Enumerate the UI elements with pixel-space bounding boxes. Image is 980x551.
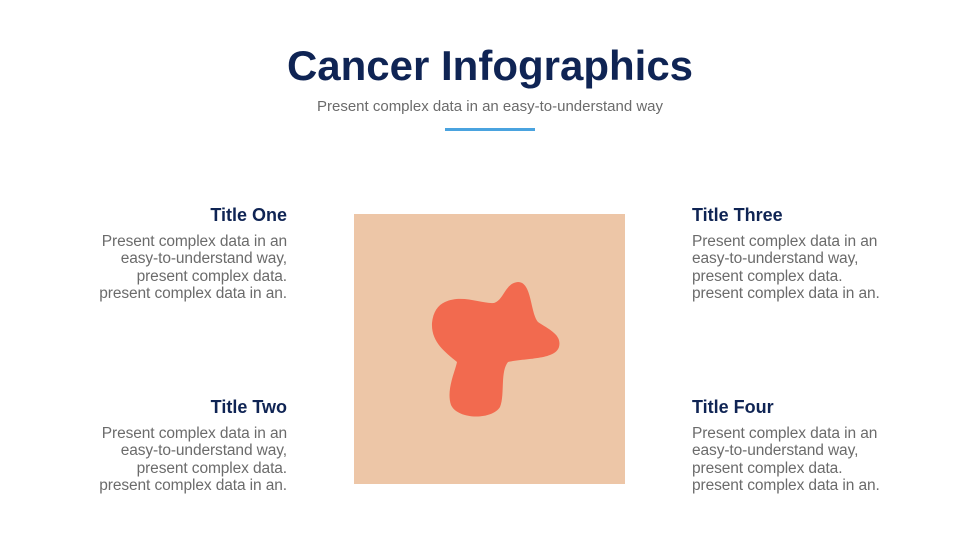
panel: title four: present complex data.	[692, 460, 842, 477]
panel: title four: present complex data in an.	[692, 477, 880, 494]
subtitle: Present complex data in an easy-to-understand way	[317, 98, 663, 115]
panel: title four	[692, 397, 880, 494]
panel: title three: present complex data.	[692, 268, 842, 285]
panel: title two: present complex data.	[137, 460, 287, 477]
panel: title one	[99, 205, 287, 302]
panel: title two: easy-to-understand way,	[121, 442, 287, 459]
panel: title four: easy-to-understand way,	[692, 442, 858, 459]
panel: title four: Present complex data in an	[692, 425, 877, 442]
title: Cancer Infographics	[287, 42, 693, 89]
panel: title three: present complex data in an.	[692, 285, 880, 302]
panel: title one: easy-to-understand way,	[121, 250, 287, 267]
divider accent	[445, 128, 535, 131]
panel: title four: Title Four	[692, 397, 774, 417]
panel: title two: Title Two	[211, 397, 287, 417]
panel: title one: present complex data.	[137, 268, 287, 285]
panel: title two: present complex data in an.	[99, 477, 287, 494]
panel: title three	[692, 205, 880, 302]
panel: title three: Title Three	[692, 205, 783, 225]
panel: title three: Present complex data in an	[692, 233, 877, 250]
panel: title two	[99, 397, 287, 494]
panel: title one: present complex data in an.	[99, 285, 287, 302]
panel: title one: Present complex data in an	[102, 233, 287, 250]
panel: title three: easy-to-understand way,	[692, 250, 858, 267]
panel: title one: Title One	[210, 205, 287, 225]
panel: title two: Present complex data in an	[102, 425, 287, 442]
